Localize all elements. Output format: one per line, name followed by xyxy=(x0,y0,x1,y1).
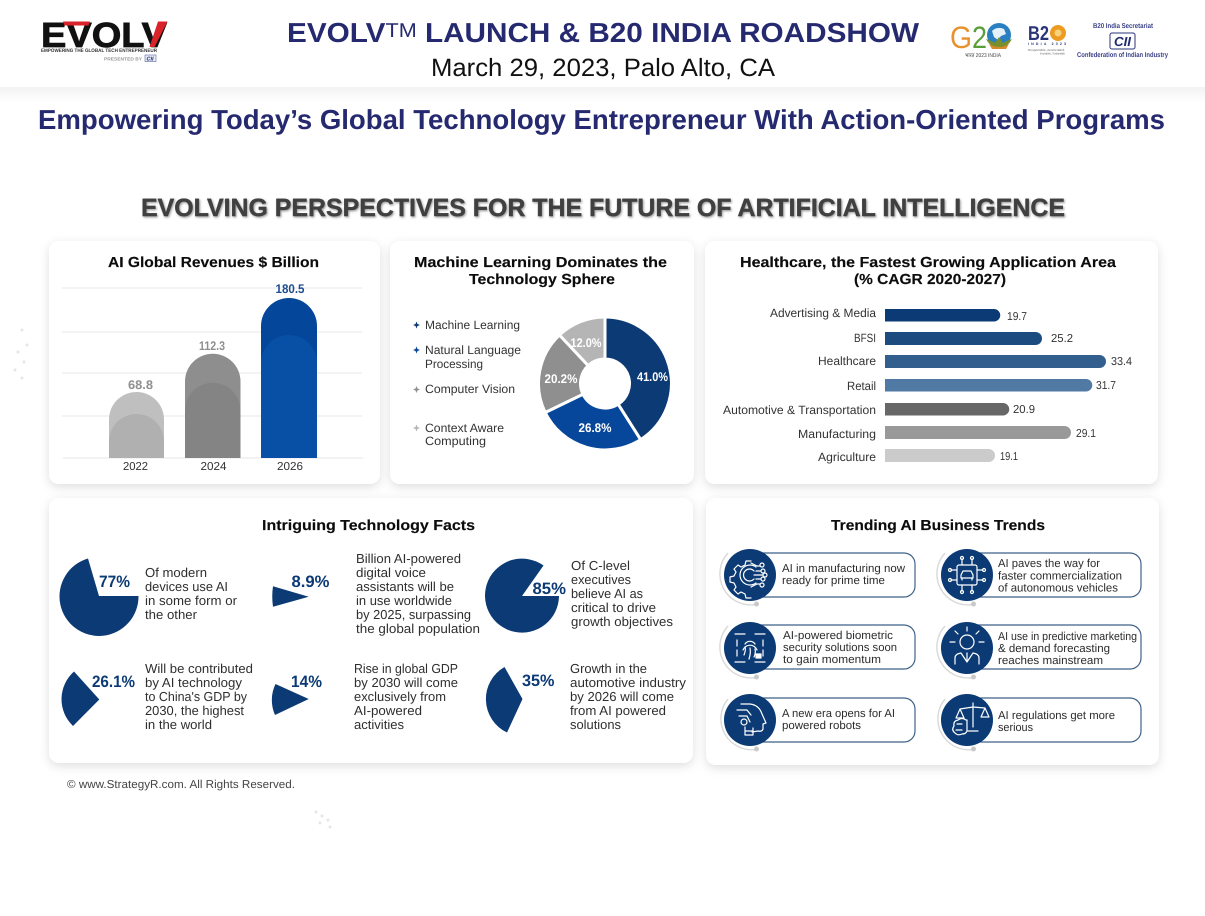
bar chart: revenues: 2026 xyxy=(277,461,303,473)
legend: technologies: Computing xyxy=(425,434,486,448)
heading: application areas: Healthcare, the Fastest Growing Application Area xyxy=(740,255,1117,271)
fact: 26.1%: in the world xyxy=(145,717,212,732)
logo: CII: Confederation of Indian Industry xyxy=(1077,51,1168,59)
panel: AI global revenues xyxy=(49,241,380,484)
bar chart: revenues xyxy=(109,282,317,473)
donut chart: technology share: 41.0% xyxy=(637,370,668,384)
fact: 14%: by 2030 will come xyxy=(354,675,458,690)
bar chart: CAGR by application: Advertising & Media xyxy=(770,306,876,320)
bar chart: CAGR by application: Manufacturing xyxy=(798,427,876,441)
heading: application areas: (% CAGR 2020-2027) xyxy=(854,272,1006,288)
donut chart: technology share: 12.0% xyxy=(570,336,602,350)
logo: CII: CII xyxy=(1114,34,1131,49)
logo: B20: Innovative, Sustainable xyxy=(1040,52,1065,56)
bar chart: CAGR by application: 19.7 xyxy=(1007,311,1027,323)
donut chart: technology share xyxy=(539,317,671,450)
fact: 85%: Of C-level xyxy=(571,558,630,573)
heading: AI business trends: Trending AI Business Trends xyxy=(831,518,1045,534)
bar chart: CAGR by application: Retail xyxy=(847,379,876,393)
bar chart: revenues: 2024 xyxy=(200,461,227,473)
logo: B20: B2 xyxy=(1028,23,1049,45)
fact: 85%: executives xyxy=(571,572,631,587)
bar chart: CAGR by application: Agriculture xyxy=(818,450,876,464)
heading: machine learning: Machine Learning Dominates the xyxy=(414,255,667,271)
bar chart: CAGR by application: BFSI xyxy=(854,331,876,345)
bar chart: CAGR by application: Healthcare xyxy=(818,354,876,368)
fact: 8.9%: in use worldwide xyxy=(356,593,452,608)
fact: 8.9%: Billion AI-powered xyxy=(356,551,461,566)
fact: 14%: 14% xyxy=(291,673,322,691)
fact: 8.9%: digital voice xyxy=(356,565,426,580)
bar chart: CAGR by application: 20.9 xyxy=(1013,404,1035,416)
panel: application areas xyxy=(705,241,1158,484)
fact: 35%: solutions xyxy=(570,717,621,732)
trend: AI regulations xyxy=(938,694,1141,752)
trend: predictive marketing: AI use in predictive marketing xyxy=(998,631,1137,643)
panel: AI business trends xyxy=(706,498,1159,765)
trend: robots: A new era opens for AI xyxy=(782,708,895,720)
logo: EVOLV: PRESENTED BY xyxy=(104,56,142,62)
fact: 77%: the other xyxy=(145,607,198,622)
trend: biometric security: security solutions soon xyxy=(783,642,897,654)
logo: CII xyxy=(1077,22,1168,59)
fact: 85%: believe AI as xyxy=(571,586,643,601)
logo: B20: INDIA 2023 xyxy=(1028,42,1066,46)
trend: manufacturing: AI in manufacturing now xyxy=(782,563,906,575)
fact: 26.1% xyxy=(62,661,253,732)
trend: manufacturing: ready for prime time xyxy=(782,575,885,587)
fact: 77%: Of modern xyxy=(145,565,207,580)
fact: 77% xyxy=(60,558,238,636)
trend: biometric security xyxy=(720,622,915,680)
fact: 85% xyxy=(485,558,673,633)
legend: technologies: Processing xyxy=(425,357,483,371)
logo: G20 xyxy=(950,20,1012,59)
heading: AI global revenues: AI Global Revenues $ Billion xyxy=(108,255,319,271)
trend: autonomous vehicles: of autonomous vehicles xyxy=(998,582,1118,594)
legend: technologies xyxy=(413,318,521,448)
fact: 14%: AI-powered xyxy=(354,703,422,718)
legend: technologies: Machine Learning xyxy=(425,318,520,332)
donut chart: technology share: 26.8% xyxy=(578,421,612,435)
trend: manufacturing xyxy=(720,549,915,606)
bar chart: CAGR by application: 25.2 xyxy=(1051,333,1073,345)
event date and place: March 29, 2023, Palo Alto, CA xyxy=(431,54,775,82)
logo: EVOLV: EVOLV xyxy=(41,16,168,55)
bar chart: CAGR by application: 29.1 xyxy=(1076,428,1096,440)
legend: technologies: Computer Vision xyxy=(425,382,515,396)
panel: technology facts xyxy=(49,498,693,763)
fact: 14%: activities xyxy=(354,717,404,732)
title: LAUNCH & B20 INDIA ROADSHOW xyxy=(417,17,919,48)
fact: 14%: Rise in global GDP xyxy=(354,661,458,676)
logo: B20: Responsible, Accelerated, xyxy=(1028,48,1065,52)
fact: 35%: Growth in the xyxy=(570,661,647,676)
logo: G20: भारत 2023 INDIA xyxy=(965,53,1001,59)
fact: 14% xyxy=(272,661,458,732)
section heading: EVOLVING PERSPECTIVES FOR THE FUTURE OF ARTIFICIAL INTELLIGENCE xyxy=(141,194,1065,222)
title: TM xyxy=(386,20,417,42)
logo: CII: B20 India Secretariat xyxy=(1093,22,1154,30)
trend: predictive marketing: reaches mainstream xyxy=(998,655,1103,667)
fact: 77%: 77% xyxy=(99,573,130,591)
fact: 26.1%: Will be contributed xyxy=(145,661,253,676)
trend: predictive marketing: & demand forecasting xyxy=(998,643,1110,655)
trend: robots xyxy=(721,694,915,752)
fact: 35%: automotive industry xyxy=(570,675,687,690)
bar chart: CAGR by application: 31.7 xyxy=(1096,380,1116,392)
trend: AI regulations: AI regulations get more xyxy=(998,710,1115,722)
title: EVOLV xyxy=(287,17,378,48)
bar chart: CAGR by application: 33.4 xyxy=(1111,356,1133,368)
bar chart: revenues: 68.8 xyxy=(128,378,153,392)
trend: biometric security: AI-powered biometric xyxy=(783,630,893,642)
fact: 85%: growth objectives xyxy=(571,614,673,629)
icon: brain and scales xyxy=(953,703,989,735)
panel: machine learning xyxy=(390,241,694,484)
legend: technologies: Natural Language xyxy=(425,343,521,357)
fact: 35%: by 2026 will come xyxy=(570,689,674,704)
fact: 26.1%: to China's GDP by xyxy=(145,689,247,704)
fact: 35% xyxy=(486,661,687,732)
heading: machine learning xyxy=(414,255,667,288)
icon: robot head xyxy=(737,704,766,735)
bar chart: revenues: 112.3 xyxy=(199,339,225,353)
fact: 8.9%: by 2025, surpassing xyxy=(356,607,471,622)
bar chart: CAGR by application: 19.1 xyxy=(1000,451,1018,463)
heading: machine learning: Technology Sphere xyxy=(469,272,615,288)
trend: autonomous vehicles xyxy=(937,549,1141,606)
fact: 8.9%: assistants will be xyxy=(356,579,454,594)
bar chart: CAGR by application: Automotive & Transportation xyxy=(723,403,876,417)
fact: 85%: critical to drive xyxy=(571,600,656,615)
fact: 35%: from AI powered xyxy=(570,703,666,718)
bar chart: revenues: 180.5 xyxy=(276,282,305,296)
fact: 8.9%: 8.9% xyxy=(292,573,330,591)
icon: person with idea xyxy=(950,627,984,664)
copyright note: © www.StrategyR.com. All Rights Reserved. xyxy=(67,779,295,791)
icon: car chip xyxy=(948,556,986,594)
logo: B20 xyxy=(1028,23,1066,56)
fact: 85%: 85% xyxy=(532,580,566,598)
fact: 8.9%: the global population xyxy=(356,621,480,636)
trend: autonomous vehicles: AI paves the way for xyxy=(998,558,1100,570)
fact: 8.9% xyxy=(272,551,480,636)
trend: biometric security: to gain momentum xyxy=(783,654,881,666)
trend: robots: powered robots xyxy=(782,720,861,732)
logo: G20: 2 xyxy=(972,20,987,55)
logo: G20: G xyxy=(950,20,972,55)
fact: 77%: in some form or xyxy=(145,593,238,608)
logo: EVOLV: EMPOWERING THE GLOBAL TECH ENTREPRENEUR xyxy=(41,48,157,54)
subtitle: Empowering Today’s Global Technology Entrepreneur With Action-Oriented Programs xyxy=(38,104,1165,135)
bar chart: CAGR by application xyxy=(723,306,1133,464)
icon: gear with nodes xyxy=(730,561,767,598)
legend: technologies: Context Aware xyxy=(425,421,504,435)
trend: AI regulations: serious xyxy=(998,722,1033,734)
trend: autonomous vehicles: faster commercialization xyxy=(998,570,1122,582)
heading: technology facts: Intriguing Technology Facts xyxy=(262,518,475,534)
logo: EVOLV: CII xyxy=(146,56,154,62)
fact: 26.1%: 2030, the highest xyxy=(145,703,244,718)
bar chart: revenues: 2022 xyxy=(123,461,148,473)
fact: 26.1%: 26.1% xyxy=(92,673,135,691)
donut chart: technology share: 20.2% xyxy=(544,372,578,386)
trend: predictive marketing xyxy=(937,622,1141,680)
icon: fingerprint scan xyxy=(735,634,765,662)
heading: application areas xyxy=(740,255,1117,288)
fact: 77%: devices use AI xyxy=(145,579,228,594)
fact: 26.1%: by AI technology xyxy=(145,675,243,690)
fact: 14%: exclusively from xyxy=(354,689,446,704)
fact: 35%: 35% xyxy=(522,672,555,690)
